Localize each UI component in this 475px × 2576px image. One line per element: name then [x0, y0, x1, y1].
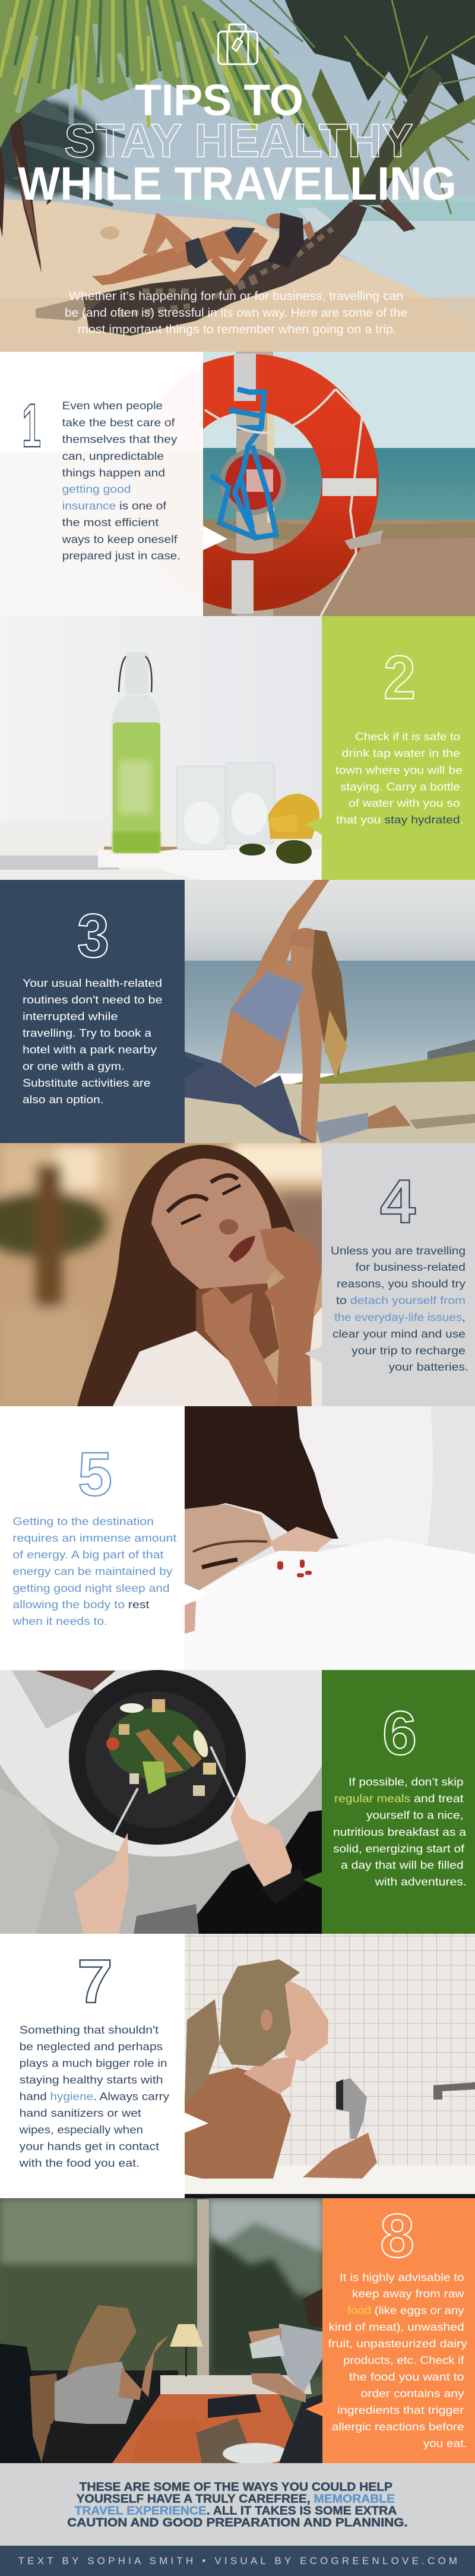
body text 2: Check if it is safe to: [355, 730, 460, 743]
title: TIPS TO: [135, 75, 303, 125]
body text 7: staying healthy starts with: [20, 2073, 163, 2086]
body text 8: the food you want to: [349, 2370, 464, 2383]
body text 4: for business-related: [355, 1261, 466, 1273]
navy text panel: [0, 880, 185, 1143]
orange text panel: [322, 2198, 475, 2463]
body text 1: ways to keep oneself: [61, 533, 178, 545]
body text 1: prepared just in case.: [62, 549, 180, 561]
body text 2: that you stay hydrated .: [336, 813, 464, 826]
left distant palm: [0, 95, 128, 205]
body text 3: Substitute activities are: [23, 1077, 150, 1089]
pointer: [185, 1056, 206, 1079]
dark crown top right: [285, 0, 475, 105]
body text 1: insurance is one of: [62, 499, 167, 512]
number 1: 1: [22, 392, 41, 460]
body text 2: [335, 730, 464, 826]
body text 5: requires an immense amount: [12, 1532, 176, 1544]
body text 7: Something that shouldn't: [20, 2023, 159, 2036]
title: WHILE TRAVELLING: [18, 157, 457, 210]
intro text: be (and often is) stressful in its own way. Here are some of the: [65, 307, 407, 320]
body text 8: you eat.: [423, 2437, 467, 2449]
panel: tip 5 rest: [12, 1406, 475, 1634]
number 4: 4: [380, 1167, 416, 1236]
body text 4: to detach yourself from: [336, 1294, 466, 1306]
body text 2: staying. Carry a bottle: [340, 781, 460, 793]
woman: [92, 213, 315, 285]
photo: woman in shower: [185, 1934, 475, 2198]
body text 8: [328, 2271, 468, 2449]
closing text: THESE ARE SOME OF THE WAYS YOU COULD HELP: [80, 2481, 392, 2494]
body text 7: hand sanitizers or wet: [20, 2107, 141, 2119]
body text 5: Getting to the destination: [12, 1515, 154, 1527]
body text 6: yourself to a nice,: [366, 1809, 464, 1821]
photo: lifebuoy at beach: [203, 352, 475, 616]
title: STAY HEALTHY: [64, 114, 413, 167]
panel: tip 1 insurance: [0, 352, 475, 616]
body text 7: wipes, especially when: [19, 2123, 143, 2136]
body text 6: If possible, don’t skip: [349, 1775, 464, 1788]
panel: closing statement: [0, 2463, 475, 2546]
number 8: 8: [380, 2202, 414, 2271]
body text 1: take the best care of: [62, 416, 175, 429]
gray text panel: [322, 1143, 475, 1406]
woman: [185, 880, 411, 1143]
body text 3: [23, 977, 163, 1106]
panel: tip 4 relax: [0, 1141, 475, 1406]
main green frond: [0, 0, 332, 160]
photo: woman sleeping under duvet: [185, 1406, 475, 1634]
pointer: [305, 1346, 322, 1363]
body text 8: keep away from raw: [352, 2287, 464, 2300]
green text panel: [322, 1670, 475, 1934]
body text 4: reasons, you should try: [337, 1277, 466, 1290]
body text 3: Your usual health-related: [23, 977, 162, 989]
body text 4: your batteries.: [389, 1360, 468, 1373]
panel: tip 8 food: [0, 2198, 475, 2464]
body text 4: clear your mind and use: [332, 1327, 466, 1340]
body text 3: routines don't need to be: [23, 993, 163, 1006]
body text 4: your trip to recharge: [352, 1344, 466, 1357]
body text 1: the most efficient: [62, 516, 159, 529]
intro text: most important things to remember when going on a trip.: [78, 323, 397, 336]
body text 3: hotel with a park nearby: [23, 1043, 157, 1056]
body text 3: interrupted while: [23, 1010, 118, 1022]
body text 1: getting good: [62, 482, 131, 495]
closing text: TRAVEL EXPERIENCE . ALL IT TAKES IS SOME EXTRA: [75, 2504, 397, 2517]
body text 1: [61, 399, 180, 561]
pointer: [185, 2113, 208, 2133]
number 5: 5: [78, 1440, 112, 1509]
white text panel: [0, 1406, 185, 1670]
number 7: 7: [77, 1947, 113, 2016]
body text 7: be neglected and perhaps: [20, 2040, 163, 2053]
body text 4: [331, 1244, 468, 1373]
body text 6: with adventures.: [374, 1876, 467, 1888]
leaning trunk: [83, 202, 367, 336]
number 2: 2: [384, 643, 416, 712]
body text 5: getting good night sleep and: [12, 1581, 170, 1594]
text column background: [0, 352, 203, 616]
closing text: YOURSELF HAVE A TRULY CAREFREE, MEMORABLE: [77, 2493, 395, 2506]
body text 3: also an option.: [23, 1093, 103, 1106]
body text 7: [19, 2023, 170, 2169]
body text 4: Unless you are travelling: [331, 1244, 466, 1257]
body text 6: [333, 1775, 467, 1888]
pointer: [203, 526, 227, 550]
pointer: [185, 1584, 208, 1605]
body text 8: allergic reactions before: [332, 2420, 464, 2433]
photo: woman with closed eyes: [0, 1141, 332, 1406]
footer credits: [0, 2546, 475, 2576]
photo: water bottle and glasses: [0, 616, 322, 880]
green text panel: [322, 616, 475, 880]
pointer: [306, 2402, 322, 2416]
body text 8: order contains any: [361, 2387, 464, 2400]
panel: header photo with title: [0, 0, 475, 352]
hanging brown frond: [0, 118, 42, 273]
body text 5: of energy. A big part of that: [12, 1548, 164, 1561]
body text 1: things happen and: [62, 466, 165, 479]
body text 8: products, etc. Check if: [343, 2354, 465, 2366]
body text 7: hand hygiene . Always carry: [20, 2090, 170, 2103]
photo: salad plate on marble table: [0, 1670, 322, 1934]
pointer: [303, 1872, 322, 1888]
body text 8: ingredients that trigger: [337, 2404, 464, 2416]
body text 1: can, unpredictable: [62, 450, 164, 462]
body text 8: kind of meat), unwashed: [329, 2321, 464, 2333]
closing text: CAUTION AND GOOD PREPARATION AND PLANNING.: [67, 2517, 408, 2530]
body text 3: or one with a gym.: [23, 1060, 125, 1072]
body text 8: It is highly advisable to: [340, 2271, 464, 2283]
body text 5: energy can be maintained by: [12, 1565, 173, 1577]
body text 1: Even when people: [62, 399, 163, 412]
sand shell: [100, 226, 119, 239]
body text 6: nutritious breakfast as a: [333, 1826, 467, 1838]
body text 5: allowing the body to rest: [12, 1598, 150, 1611]
body text 1: themselves that they: [62, 433, 178, 446]
body text 8: food (like eggs or any: [347, 2304, 464, 2316]
title: [18, 75, 457, 210]
footer credits: TEXT BY SOPHIA SMITH • VISUAL BY ECOGREENLOVE.COM: [18, 2555, 457, 2566]
panel: tip 3 exercise: [0, 880, 475, 1143]
body text 2: town where you will be: [335, 763, 463, 776]
body text 5: [12, 1515, 176, 1627]
body text 7: with the food you eat.: [19, 2157, 140, 2169]
intro text: Whether it’s happening for fun or for business, travelling can: [69, 290, 403, 303]
body text 6: solid, energizing start of: [333, 1842, 465, 1855]
body text 6: regular meals and treat: [334, 1792, 464, 1805]
body text 8: fruit, unpasteurized dairy: [328, 2337, 468, 2350]
body text 2: drink tap water in the: [342, 747, 460, 759]
photo: couple dining by the window: [0, 2198, 324, 2464]
pointer: [306, 817, 322, 835]
intro text: [65, 290, 407, 336]
icon: suitcase with tag: [218, 24, 258, 64]
number 6: 6: [382, 1699, 417, 1768]
body text 5: when it needs to.: [12, 1615, 107, 1627]
panel: tip 2 hydration: [0, 616, 475, 880]
closing text: [67, 2481, 408, 2530]
panel: tip 7 hygiene: [0, 1934, 475, 2198]
white text panel: [0, 1934, 185, 2198]
photo: yoga on the beach: [185, 880, 475, 1143]
body text 7: your hands get in contact: [20, 2140, 159, 2152]
body text 3: travelling. Try to book a: [23, 1027, 152, 1039]
body text 4: the everyday-life issues ,: [334, 1311, 466, 1323]
body text 2: of water with you so: [349, 797, 460, 809]
number 3: 3: [77, 902, 109, 971]
photo: palm beach with woman on trunk: [0, 0, 475, 352]
panel: tip 6 breakfast: [0, 1670, 475, 1934]
body text 6: a day that will be filled: [341, 1858, 464, 1871]
body text 7: plays a much bigger role in: [20, 2057, 167, 2069]
